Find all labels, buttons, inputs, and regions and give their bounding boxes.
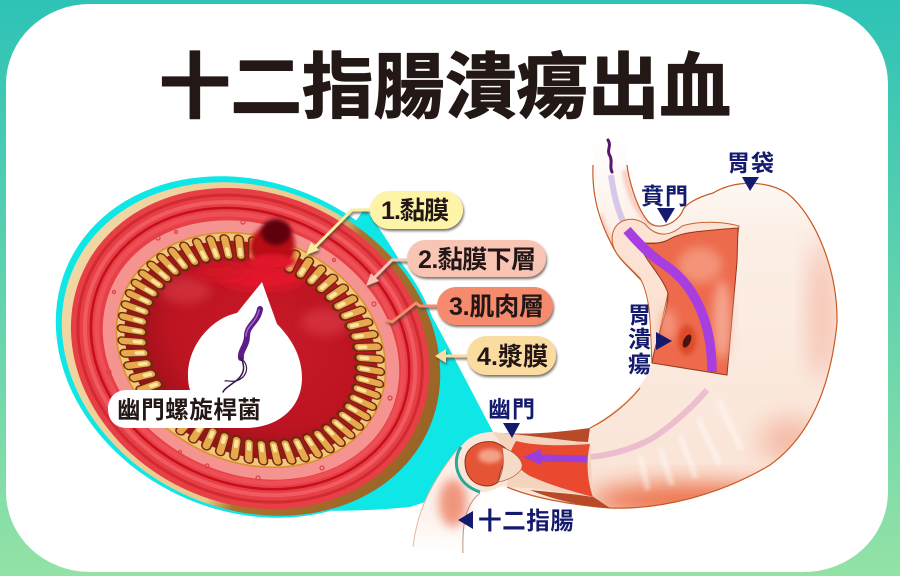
label: gastric ulcer: [628, 302, 672, 377]
text: 4.漿膜: [477, 343, 548, 371]
leader arrow: [443, 354, 469, 358]
stomach interior cutaway: [640, 228, 738, 375]
cross-section of duodenum wall: [62, 182, 440, 516]
leader arrow: [372, 260, 409, 280]
arrow head: [306, 242, 319, 255]
marker: [742, 177, 759, 191]
layer: serosa: [7, 122, 495, 576]
label: Helicobacter pylori: 幽門螺旋桿菌: [117, 397, 261, 424]
label: pylorus: 幽門: [488, 396, 535, 422]
lumen highlights and blood: [159, 264, 349, 336]
marker: [458, 511, 473, 529]
pink wall speckles: [107, 220, 392, 480]
label: fundus: [727, 150, 774, 191]
stomach shading: [590, 170, 834, 516]
villi ring: [85, 197, 417, 503]
stomach outline: [507, 165, 837, 508]
arrow head: [366, 273, 379, 286]
pylorus duct walls: [493, 428, 590, 442]
stomach body: [457, 140, 837, 508]
pill: [370, 191, 463, 229]
cardia rim: [612, 219, 739, 363]
cyan zoom wedge: [0, 114, 499, 576]
lumen: [88, 200, 414, 500]
arrow head: [435, 349, 446, 363]
interior texture: [660, 247, 731, 360]
text: 1.黏膜: [381, 197, 449, 225]
layer: mucosa base: [78, 190, 424, 510]
pale pyloric sphincter: [498, 447, 522, 482]
layer: submucosa: [60, 173, 442, 527]
leader bracket: [386, 303, 439, 322]
purple food path upper: [627, 230, 712, 372]
callout 1: mucosa: [306, 191, 463, 255]
gastric ulcer spot: [678, 325, 696, 355]
ulcer crater: [248, 219, 296, 270]
pill: [407, 240, 546, 277]
marker: [503, 423, 520, 438]
stomach illustration: [413, 140, 837, 553]
label: cardia: [641, 183, 688, 223]
title: 十二指腸潰瘍出血: [159, 48, 731, 128]
marker: [656, 332, 672, 350]
callout 4: serosa: [435, 336, 556, 375]
callout 2: submucosa: [366, 240, 546, 286]
pill: [467, 336, 556, 375]
label: gastric ulcer: 瘍: [628, 351, 651, 377]
marker: [657, 208, 675, 223]
label: gastric ulcer: 潰: [628, 326, 651, 352]
purple arrow in pylorus: [523, 449, 587, 465]
teal pylorus ring: [456, 447, 480, 492]
bulb highlight: [478, 449, 502, 463]
esophagus bacterium: [608, 140, 612, 172]
label: pylorus: [488, 396, 535, 438]
text: 2.黏膜下層: [418, 246, 536, 274]
pill: [437, 287, 553, 325]
label: duodenum: 十二指腸: [478, 508, 574, 535]
callout: Helicobacter bubble: [108, 282, 302, 428]
leader arrow: [313, 210, 372, 249]
label: gastric ulcer: 胃: [628, 302, 651, 328]
label: cardia: 賁門: [641, 183, 688, 209]
layer: muscle: [18, 130, 482, 567]
icon: bacterium: [223, 309, 260, 392]
rugae: [640, 400, 742, 490]
label: fundus: 胃袋: [727, 150, 774, 176]
callout 3: muscle layer: [386, 287, 553, 325]
duodenum: [413, 450, 480, 553]
pyloric bulb: [465, 442, 510, 486]
pale duct wall: [493, 432, 593, 497]
pylorus interior: [510, 441, 593, 497]
text: 3.肌肉層: [449, 293, 544, 321]
